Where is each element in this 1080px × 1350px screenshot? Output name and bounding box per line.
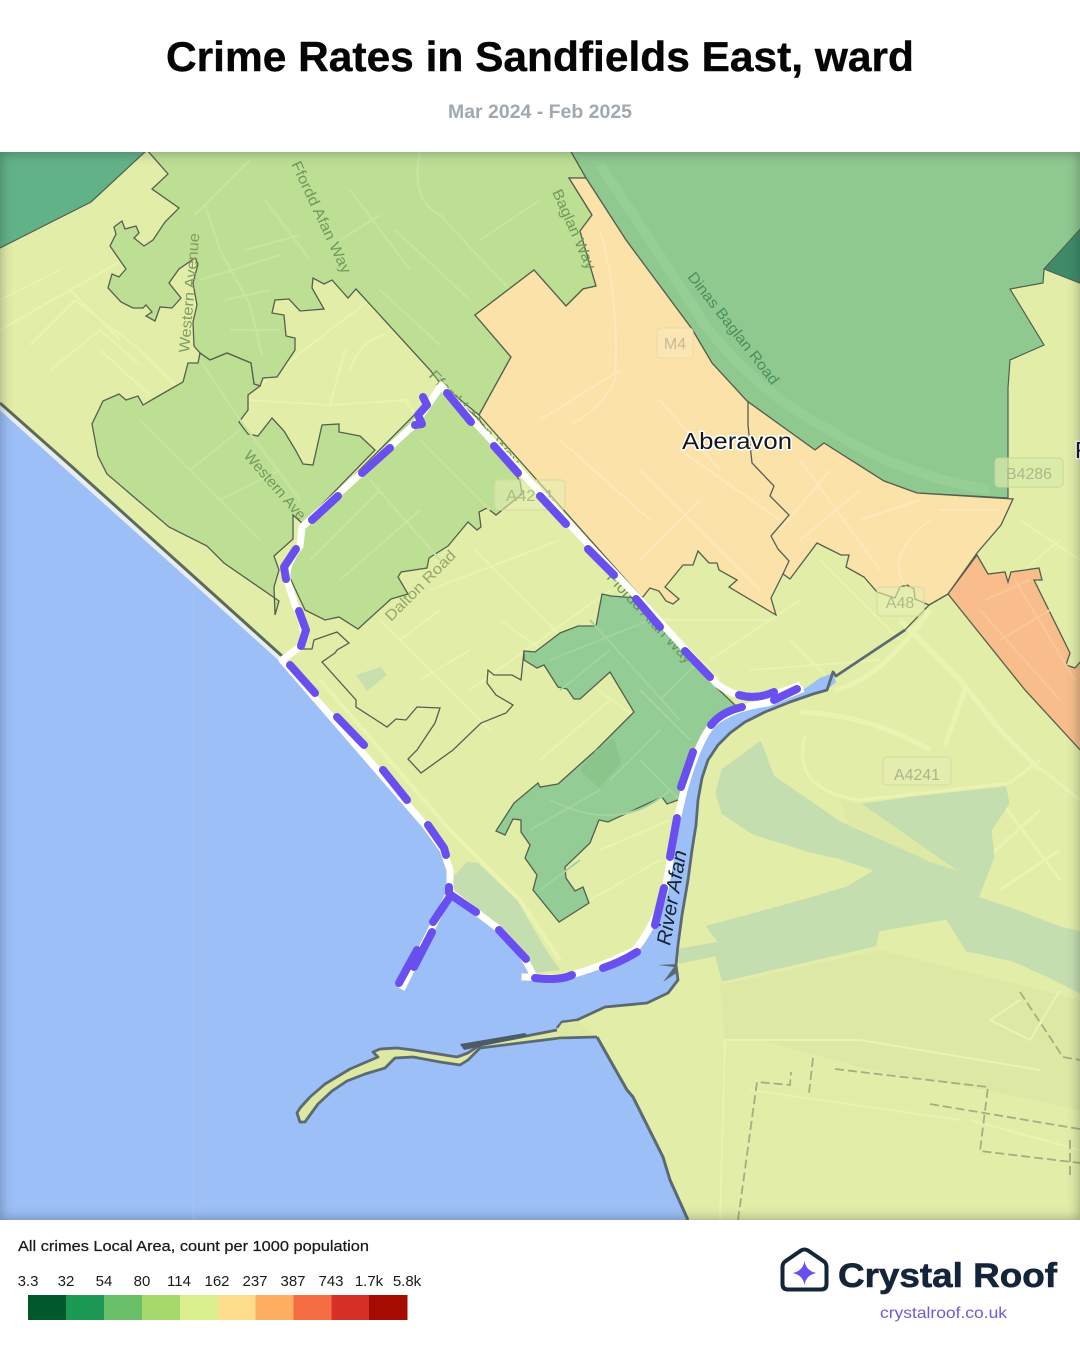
place label: Aberavon: Aberavon [682, 428, 792, 454]
subtitle: date range: Mar 2024 - Feb 2025 [448, 102, 632, 123]
sea [0, 405, 836, 1222]
breakwater groyne [297, 1021, 597, 1122]
road label: Western Ave: Western Ave [240, 447, 309, 524]
legend scale labels: 32 [58, 1273, 74, 1290]
southern industrial land tone [720, 950, 1080, 1110]
patch inside ward green [593, 748, 600, 754]
streets on green land [140, 152, 540, 580]
legend scale labels: 80 [134, 1273, 150, 1290]
road shield: M4: M4 [664, 336, 686, 353]
ward boundary: white outline [282, 386, 800, 986]
map panel [0, 150, 1080, 1222]
map base: low crime yellow-green land [0, 152, 1080, 1220]
ward internal boundary [301, 632, 524, 773]
ward boundary: purple dashes [284, 393, 797, 983]
road shield: B4286: B4286 [1006, 466, 1052, 483]
map edge vignette [0, 152, 1080, 1220]
legend [18, 1238, 422, 1320]
coastline: west shore [0, 407, 282, 660]
river mouth spikes [658, 964, 678, 982]
hillside road band [600, 165, 990, 490]
area: lower-left light green [92, 353, 375, 615]
area: ward mid green [496, 594, 735, 922]
road shield: A4241 east [883, 757, 951, 785]
area: ward north-west light green [286, 388, 522, 629]
icon: house with star [782, 1250, 826, 1290]
dock yellow spit [862, 804, 958, 871]
boundary towards east [905, 594, 948, 630]
road label: Ffordd Afan Way north: Ffordd Afan Way [287, 159, 355, 277]
road shield: A4241 ward [495, 480, 565, 510]
road label: Dinas Baglan Road: Dinas Baglan Road [684, 269, 782, 388]
streets on ward mid green [530, 620, 700, 890]
area: east orange [948, 555, 1080, 752]
logo wordmark: Crystal Roof [838, 1257, 1058, 1295]
area: top-right darkest green corner [1044, 227, 1080, 284]
road label: Baglan Way: Baglan Way [548, 187, 599, 273]
area: top-right mid green hillside [570, 150, 1080, 498]
area: Aberavon orange-yellow [475, 178, 1013, 615]
road shield: A48: A48 [886, 595, 914, 612]
road label: Ffordd Afan Way ward: Ffordd Afan Way [425, 367, 523, 471]
streets on Aberavon [540, 230, 1000, 590]
road label: Dalton Road: Dalton Road [382, 547, 460, 625]
legend title: All crimes Local Area, count per 1000 population [18, 1238, 369, 1255]
legend scale labels: 5.8k [393, 1273, 422, 1290]
legend scale labels: 387 [280, 1273, 306, 1290]
legend scale labels: 237 [242, 1273, 268, 1290]
road label: Western Avenue: Western Avenue [176, 232, 203, 353]
road shield: A4241 ward: A4241 [506, 488, 554, 505]
road shield: A4241 east: A4241 [894, 767, 940, 784]
legend scale labels: 3.3 [18, 1273, 38, 1290]
legend scale labels: 54 [96, 1273, 112, 1290]
road shield: B4286 [995, 458, 1063, 487]
boundary inside Aberavon [748, 401, 789, 574]
legend scale labels: 114 [167, 1273, 191, 1290]
legend scale labels [18, 1273, 422, 1290]
coastline: south shore [597, 1037, 688, 1220]
coastline: river east bank [557, 630, 905, 1028]
road label: Ffordd Afan Way south: Ffordd Afan Way [603, 569, 696, 667]
road shield: M4 [657, 328, 693, 358]
area: top-left darker green [0, 150, 147, 249]
logo: Crystal Roof [782, 1250, 1058, 1322]
patch: ward building [356, 667, 387, 691]
legend scale labels: 743 [318, 1273, 344, 1290]
sea seam line [192, 590, 194, 1220]
docks water patches [680, 743, 1080, 993]
industrial rail tracks [738, 992, 1080, 1220]
legend scale labels: 162 [204, 1273, 230, 1290]
legend colour bar [28, 1295, 408, 1320]
breakwater dark wedge [460, 1033, 528, 1050]
patch: beach [453, 862, 560, 973]
title: Crime Rates in Sandfields East, ward [166, 33, 914, 80]
road shield: A48 [877, 587, 924, 616]
area: upper light green [108, 150, 596, 415]
streets on yellow land [0, 262, 1080, 1220]
streets in east orange [980, 580, 1075, 700]
river label: River Afan [653, 849, 692, 947]
coastline: west shore dark edge [0, 403, 282, 656]
logo website: crystalroof.co.uk [880, 1305, 1008, 1322]
legend scale labels: 1.7k [355, 1273, 384, 1290]
